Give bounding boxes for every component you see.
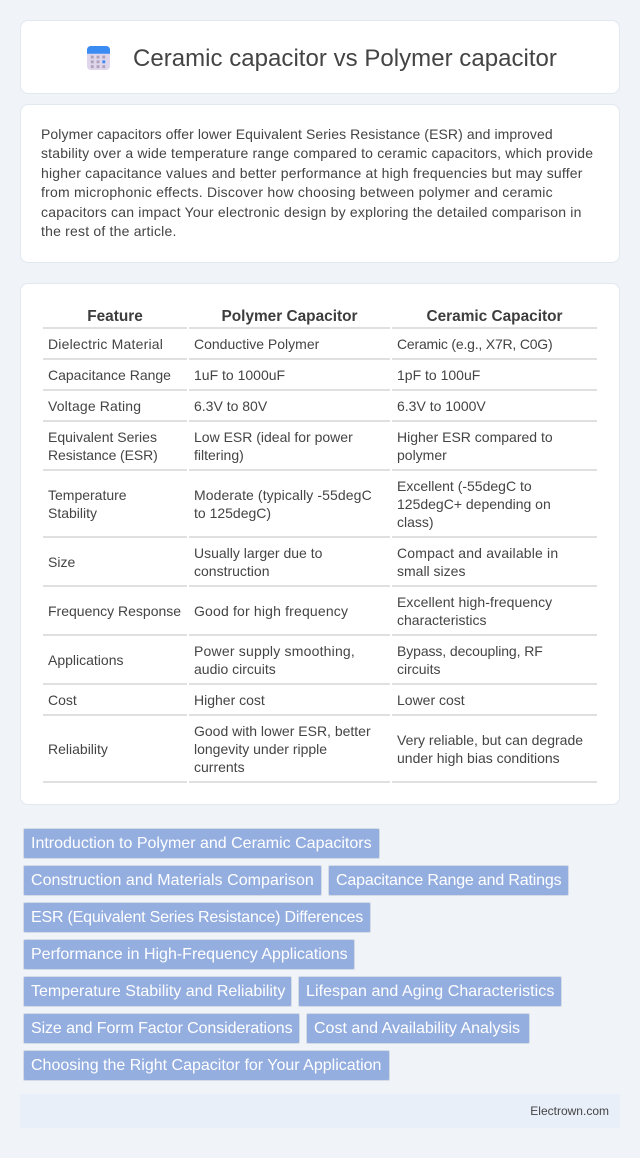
row: frequency response: Good for high frequency	[194, 603, 348, 619]
tag: choosing: Choosing the Right Capacitor for Your Application	[31, 1057, 381, 1074]
tag: capacitance	[328, 865, 569, 896]
row: frequency response: Frequency Response	[48, 603, 181, 619]
row: temperature stability: 125degC+ depending on	[397, 496, 551, 512]
row: reliability: under high bias conditions	[397, 750, 560, 766]
row: voltage rating: 6.3V to 80V	[194, 398, 267, 414]
row: frequency response: characteristics	[397, 612, 486, 628]
row: size: Compact and available in	[397, 545, 558, 561]
row: capacitance range: Capacitance Range	[48, 367, 171, 383]
row: dielectric material	[43, 336, 597, 360]
tag: ESR: ESR (Equivalent Series Resistance) Differences	[31, 909, 363, 926]
text block: introduction: Polymer capacitors offer lower Equivalent Series Resistance (ESR) and improved	[41, 126, 553, 142]
footer credit: Electrown.com	[530, 1104, 609, 1118]
tag: cost	[306, 1013, 530, 1044]
tag: high frequency	[23, 939, 355, 970]
text block: introduction: from microphonic effects. Discover how choosing between polymer and ceramic	[41, 184, 553, 200]
row: equivalent series resistance: Equivalent Series	[48, 429, 157, 445]
row: equivalent series resistance: Low ESR (ideal for power	[194, 429, 353, 445]
row: temperature stability	[43, 478, 597, 538]
panel: introduction	[20, 104, 620, 263]
text block: introduction	[41, 126, 593, 239]
row: applications: Bypass, decoupling, RF	[397, 643, 543, 659]
row: capacitance range: 1pF to 100uF	[397, 367, 480, 383]
row: cost: Higher cost	[194, 692, 265, 708]
tag: cost: Cost and Availability Analysis	[314, 1020, 520, 1037]
tag: construction: Construction and Materials Comparison	[31, 872, 314, 889]
row: temperature stability: Temperature	[48, 487, 127, 503]
row: frequency response	[43, 594, 597, 636]
row: size: small sizes	[397, 563, 465, 579]
tag: temperature	[23, 976, 292, 1007]
table header	[43, 308, 597, 329]
row: size	[43, 545, 597, 587]
row: temperature stability: to 125degC)	[194, 505, 271, 521]
tag: ESR	[23, 902, 371, 933]
tag: introduction: Introduction to Polymer and Ceramic Capacitors	[31, 835, 372, 852]
panel: topic tags	[23, 828, 569, 1081]
text block: introduction: the rest of the article.	[41, 223, 177, 239]
tag: temperature: Temperature Stability and Reliability	[31, 983, 285, 1000]
row: size: Size	[48, 554, 75, 570]
row: dielectric material: Ceramic (e.g., X7R, C0G)	[397, 336, 552, 352]
row: dielectric material: Conductive Polymer	[194, 336, 319, 352]
row: reliability: Very reliable, but can degrade	[397, 732, 583, 748]
row: reliability: longevity under ripple	[194, 741, 327, 757]
row: dielectric material: Dielectric Material	[48, 336, 163, 352]
row: applications: Power supply smoothing,	[194, 643, 355, 659]
row: reliability: Reliability	[48, 741, 108, 757]
icon: calendar	[87, 46, 110, 70]
tag: capacitance: Capacitance Range and Ratings	[336, 872, 561, 889]
row: temperature stability: Excellent (-55degC to	[397, 478, 532, 494]
row: size: construction	[194, 563, 269, 579]
tag: size: Size and Form Factor Considerations	[31, 1020, 293, 1037]
tag: construction	[23, 865, 322, 896]
row: temperature stability: Stability	[48, 505, 97, 521]
row: reliability: Good with lower ESR, better	[194, 723, 371, 739]
row: applications	[43, 643, 597, 685]
row: reliability: currents	[194, 759, 245, 775]
tag: choosing	[23, 1050, 390, 1081]
tag: lifespan	[298, 976, 562, 1007]
row: temperature stability: Moderate (typically -55degC	[194, 487, 372, 503]
row: applications: Applications	[48, 652, 124, 668]
row: cost	[43, 692, 597, 716]
table header: Polymer Capacitor	[222, 308, 358, 325]
text block: introduction: higher capacitance values and better performance at high frequencies but may suffer	[41, 165, 583, 181]
text block: introduction: capacitors can impact Your electronic design by exploring the detailed comparison in	[41, 204, 582, 220]
tag: introduction	[23, 828, 380, 859]
table header: Ceramic Capacitor	[426, 308, 562, 325]
row: voltage rating: 6.3V to 1000V	[397, 398, 486, 414]
row: capacitance range	[43, 367, 597, 391]
row: cost: Cost	[48, 692, 77, 708]
row: equivalent series resistance	[43, 429, 597, 471]
panel: header	[20, 20, 620, 94]
row: applications: audio circuits	[194, 661, 276, 677]
panel: comparison table	[20, 283, 620, 805]
row: equivalent series resistance: Higher ESR compared to	[397, 429, 553, 445]
row: temperature stability: class)	[397, 514, 434, 530]
tag: size	[23, 1013, 300, 1044]
row: capacitance range: 1uF to 1000uF	[194, 367, 285, 383]
tag: high frequency: Performance in High-Frequency Applications	[31, 946, 348, 963]
row: equivalent series resistance: filtering)	[194, 447, 244, 463]
row: applications: circuits	[397, 661, 441, 677]
row: equivalent series resistance: Resistance (ESR)	[48, 447, 158, 463]
footer	[20, 1094, 620, 1128]
title: Ceramic capacitor vs Polymer capacitor	[133, 45, 557, 72]
row: voltage rating: Voltage Rating	[48, 398, 141, 414]
table header: Feature	[87, 308, 143, 325]
tag: lifespan: Lifespan and Aging Characteristics	[306, 983, 554, 1000]
row: equivalent series resistance: polymer	[397, 447, 447, 463]
row: reliability	[43, 723, 597, 783]
text block: introduction: stability over a wide temperature range compared to ceramic capacitors, which provide	[41, 145, 593, 161]
row: voltage rating	[43, 398, 597, 422]
row: cost: Lower cost	[397, 692, 465, 708]
row: size: Usually larger due to	[194, 545, 322, 561]
row: frequency response: Excellent high-frequency	[397, 594, 552, 610]
